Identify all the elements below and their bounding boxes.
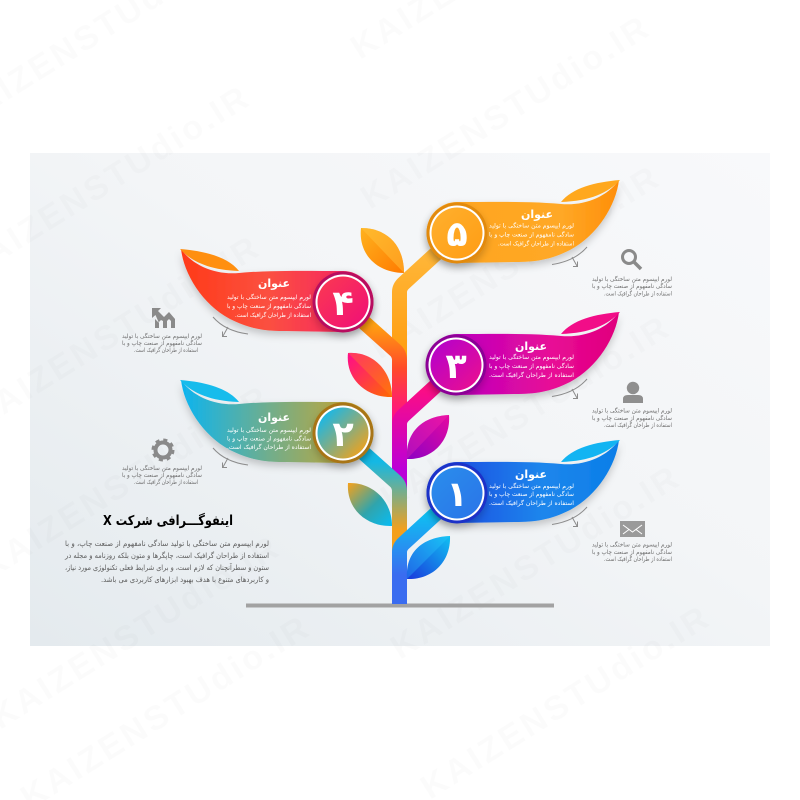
body text 3: لورم ایپسوم متن ساختگی با تولید	[489, 353, 574, 361]
side text: envelope	[592, 540, 672, 563]
watermark: KAIZENSTUdio.IR	[354, 8, 657, 217]
arrow 3	[552, 379, 587, 398]
branch 5	[400, 250, 440, 375]
side text: magnifier: استفاده از طراحان گرافیک است.	[604, 290, 672, 298]
arrows under banners	[213, 247, 587, 526]
body text 2: لورم ایپسوم متن ساختگی با تولید	[227, 426, 311, 434]
top leaf 3	[561, 312, 620, 334]
panel: step 4	[180, 249, 374, 332]
main text block: لورم ایپسوم متن ساختگی با تولید سادگی نامفهوم از صنعت چاپ، و با	[65, 539, 269, 548]
side text: gear: سادگی نامفهوم از صنعت چاپ و با	[122, 471, 202, 479]
side text: gear: لورم ایپسوم متن ساختگی با تولید	[122, 464, 202, 472]
main text block	[64, 539, 269, 584]
watermark: KAIZENSTUdio.IR	[374, 308, 677, 517]
arrow 4	[213, 317, 248, 336]
top leaf 4	[180, 249, 239, 271]
side text: house	[122, 332, 202, 354]
panel: step 5	[426, 180, 620, 264]
leaf: teal and orange	[348, 483, 392, 526]
circle badge 3	[426, 334, 486, 396]
arrow 5	[552, 247, 587, 266]
body text 5	[489, 222, 574, 248]
banner shape 3	[426, 312, 619, 395]
body text 2: استفاده از طراحان گرافیک است.	[227, 443, 311, 451]
panel: step 2	[180, 380, 374, 464]
body text 3	[489, 353, 574, 379]
panel: infographic background	[30, 153, 770, 646]
main text block: و کاربردهای متنوع با هدف بهبود ابزارهای کاربردی می باشد.	[101, 575, 269, 584]
title 1: عنوان	[515, 468, 547, 481]
main text block: ستون و سطرآنچنان که لازم است، و برای شرایط فعلی تکنولوژی مورد نیاز،	[65, 562, 269, 572]
circle badge 4	[312, 272, 374, 332]
banner shape 2	[181, 380, 374, 463]
number 4: ۴	[332, 284, 354, 324]
number 5: ۵	[446, 215, 468, 255]
watermark: KAIZENSTUdio.IR	[384, 458, 687, 667]
body text 1: لورم ایپسوم متن ساختگی با تولید	[489, 482, 574, 490]
body text 3: سادگی نامفهوم از صنعت چاپ و با	[489, 362, 574, 370]
branch 4	[358, 317, 400, 432]
body text 3: استفاده از طراحان گرافیک است.	[489, 371, 574, 379]
icon: house and arrow	[152, 308, 175, 328]
leaf: blue	[407, 536, 450, 579]
side text: person: لورم ایپسوم متن ساختگی با تولید	[592, 406, 672, 414]
icon: person	[623, 382, 643, 403]
side text: envelope: لورم ایپسوم متن ساختگی با تولید	[592, 540, 672, 548]
number 3: ۳	[445, 347, 467, 387]
title 3: عنوان	[515, 340, 547, 353]
arrow 2	[213, 448, 248, 468]
side text: house: لورم ایپسوم متن ساختگی با تولید	[122, 332, 202, 340]
leaf: red	[348, 353, 392, 397]
icon: magnifier	[622, 250, 641, 269]
side text: envelope: استفاده از طراحان گرافیک است.	[604, 555, 672, 563]
side text: magnifier: لورم ایپسوم متن ساختگی با تولید	[592, 275, 672, 283]
body text 5: سادگی نامفهوم از صنعت چاپ و با	[489, 230, 574, 238]
side text: gear	[122, 464, 202, 486]
side text: house: سادگی نامفهوم از صنعت چاپ و با	[122, 339, 202, 347]
panel: step 3	[426, 312, 620, 396]
side text: person: استفاده از طراحان گرافیک است.	[604, 421, 672, 429]
branch 2	[358, 448, 400, 560]
body text 1	[489, 482, 574, 507]
side text: person: سادگی نامفهوم از صنعت چاپ و با	[592, 414, 672, 422]
leaf: orange	[361, 228, 404, 273]
arrow 1	[552, 507, 587, 526]
body text 5: لورم ایپسوم متن ساختگی با تولید	[489, 222, 574, 230]
branch 3	[400, 382, 440, 500]
icon: envelope	[620, 521, 645, 537]
side text: person	[592, 406, 672, 429]
number 2: ۲	[332, 415, 354, 455]
circle badge 1	[426, 462, 488, 524]
main text block: استفاده از طراحان گرافیک است، چاپگرها و متون بلکه روزنامه و مجله در	[64, 551, 269, 560]
plant stem and branches	[358, 250, 440, 604]
side text: envelope: سادگی نامفهوم از صنعت چاپ و با	[592, 548, 672, 556]
body text 1: سادگی نامفهوم از صنعت چاپ و با	[489, 490, 574, 498]
banner shape 1	[426, 440, 619, 523]
body text 2: سادگی نامفهوم از صنعت چاپ و با	[227, 434, 311, 442]
title 4: عنوان	[258, 277, 290, 290]
top leaf 5	[561, 180, 620, 202]
body text 4: لورم ایپسوم متن ساختگی با تولید	[227, 293, 311, 301]
side text: gear: استفاده از طراحان گرافیک است.	[134, 478, 198, 486]
side text: house: استفاده از طراحان گرافیک است.	[134, 346, 198, 354]
title 2: عنوان	[258, 411, 290, 424]
banner shape 4	[181, 249, 374, 332]
top leaf 2	[180, 380, 239, 402]
watermark: KAIZENSTUdio.IR	[364, 158, 667, 367]
body text 4: سادگی نامفهوم از صنعت چاپ و با	[227, 302, 311, 310]
body text 5: استفاده از طراحان گرافیک است.	[498, 240, 574, 248]
title 5: عنوان	[521, 208, 553, 221]
icon: gear	[153, 440, 173, 460]
body text 1: استفاده از طراحان گرافیک است.	[489, 499, 574, 507]
banner shape 5	[426, 180, 619, 263]
body text 4	[227, 293, 311, 319]
branch 1	[400, 510, 440, 604]
leaf: magenta	[407, 415, 449, 459]
number 1: ۱	[446, 475, 468, 515]
side text: magnifier	[592, 275, 672, 298]
main heading: اینفوگـــرافی شرکت X	[103, 512, 233, 529]
circle badge 2	[312, 402, 374, 464]
body text 2	[227, 426, 311, 451]
circle badge 5	[426, 202, 488, 264]
panel: step 1	[426, 440, 620, 524]
side text: magnifier: سادگی نامفهوم از صنعت چاپ و با	[592, 282, 672, 290]
ground line	[246, 604, 554, 608]
top leaf 1	[561, 440, 620, 462]
body text 4: استفاده از طراحان گرافیک است.	[235, 311, 311, 319]
